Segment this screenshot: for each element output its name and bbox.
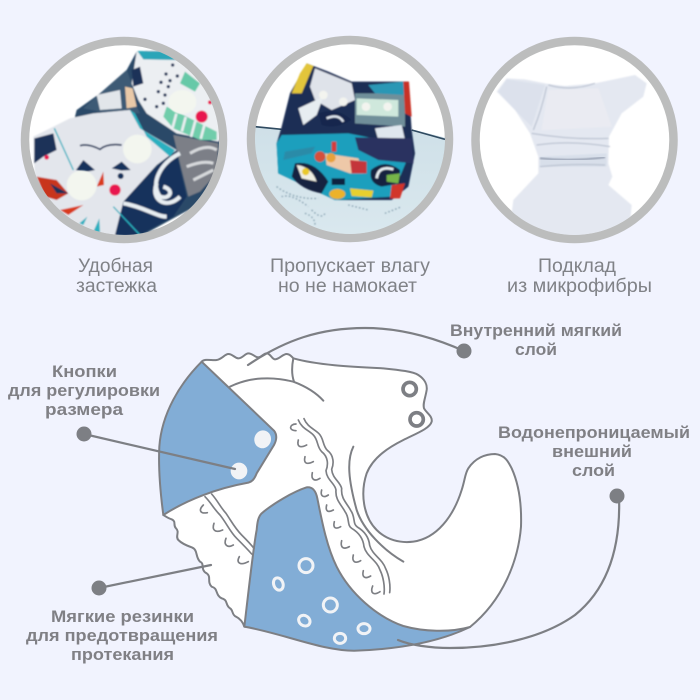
label: inner soft layer <box>450 322 622 359</box>
icon: white snaps on blue panel <box>231 428 273 479</box>
label: size adjustment snaps: для регулировки <box>8 382 160 400</box>
label: inner soft layer: слой <box>515 341 557 359</box>
callout line: waterproof outer layer <box>398 488 624 648</box>
label: inner soft layer: Внутренний мягкий <box>450 322 622 340</box>
panel: microfiber lining photo <box>476 41 674 243</box>
blue panel: size adjustment snaps <box>159 362 276 515</box>
label: size adjustment snaps: Кнопки <box>52 363 117 381</box>
callout line: size adjustment snaps <box>76 426 235 469</box>
blue panel: waterproof outer layer <box>244 487 470 651</box>
icon: grey snap rings <box>403 382 423 426</box>
caption: breathable but waterproof: Пропускает влагу <box>270 256 431 277</box>
caption: convenient fastener: застежка <box>76 276 157 297</box>
label: soft elastics: Мягкие резинки <box>51 608 194 626</box>
icon: snap buttons <box>67 107 184 200</box>
elastic wave lines <box>205 419 390 594</box>
label: size adjustment snaps: размера <box>45 401 124 419</box>
icon: snap rings on lower blue panel <box>272 559 370 643</box>
caption: convenient fastener: Удобная <box>78 256 153 277</box>
panel: snap fastener photo <box>25 41 233 239</box>
panel: water photo <box>248 40 452 250</box>
diagram: open diaper illustration <box>159 353 521 651</box>
label: soft elastics <box>26 608 218 664</box>
caption: breathable but waterproof <box>270 256 431 297</box>
label: soft elastics: для предотвращения <box>26 627 218 645</box>
caption: microfiber lining <box>507 256 652 297</box>
callout line: inner soft layer <box>248 328 472 365</box>
callout line: soft elastics <box>92 565 211 596</box>
label: waterproof outer layer: внешний <box>552 443 632 461</box>
elastic stitch hooks <box>200 424 380 594</box>
caption: microfiber lining: Подклад <box>538 256 616 277</box>
label: waterproof outer layer <box>498 424 690 480</box>
label: soft elastics: протекания <box>71 646 174 664</box>
caption: convenient fastener <box>76 256 157 297</box>
label: waterproof outer layer: слой <box>572 462 615 480</box>
inner seam lines <box>230 358 403 562</box>
label: waterproof outer layer: Водонепроницаемый <box>498 424 690 442</box>
label: size adjustment snaps <box>8 363 160 419</box>
caption: microfiber lining: из микрофибры <box>507 276 652 297</box>
white diaper body <box>163 353 521 638</box>
caption: breathable but waterproof: но не намокает <box>278 276 417 297</box>
